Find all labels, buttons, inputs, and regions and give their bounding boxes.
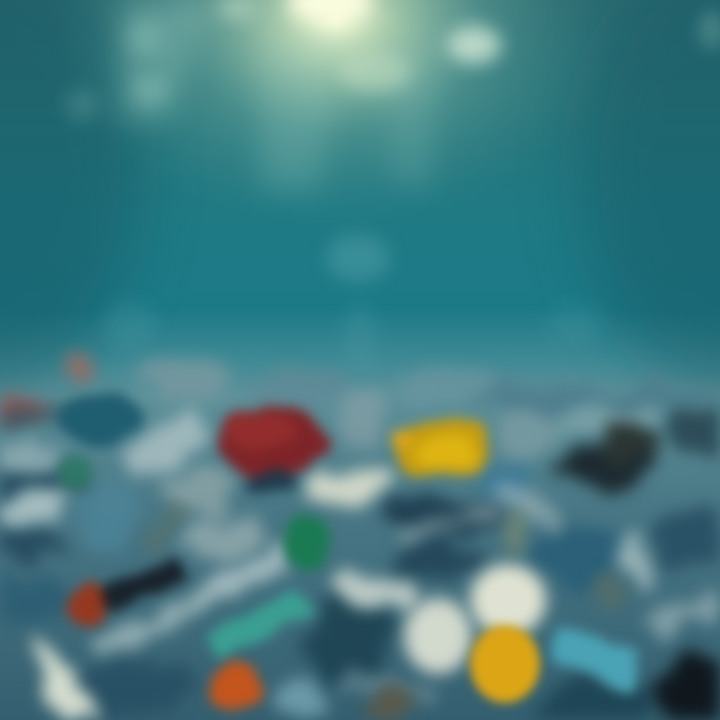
teal bottle, upper left (60, 392, 140, 488)
orange cap (209, 660, 263, 712)
dark tube with orange end (70, 495, 190, 624)
sunlight glow (55, 0, 615, 230)
dark debris, right (553, 422, 657, 485)
dark bottom corner and brown debris (276, 512, 720, 720)
light blue bottle (552, 625, 640, 690)
light rays and bubbles (66, 0, 720, 376)
debris field shadows and pale patches (0, 396, 720, 720)
white and yellow bottle (404, 564, 546, 703)
green cap (282, 516, 332, 570)
red plastic object (218, 405, 326, 494)
pale plastic strips (0, 410, 720, 720)
turquoise bottle (204, 590, 316, 658)
distant debris band (0, 352, 720, 426)
yellow plastic object (390, 419, 492, 479)
